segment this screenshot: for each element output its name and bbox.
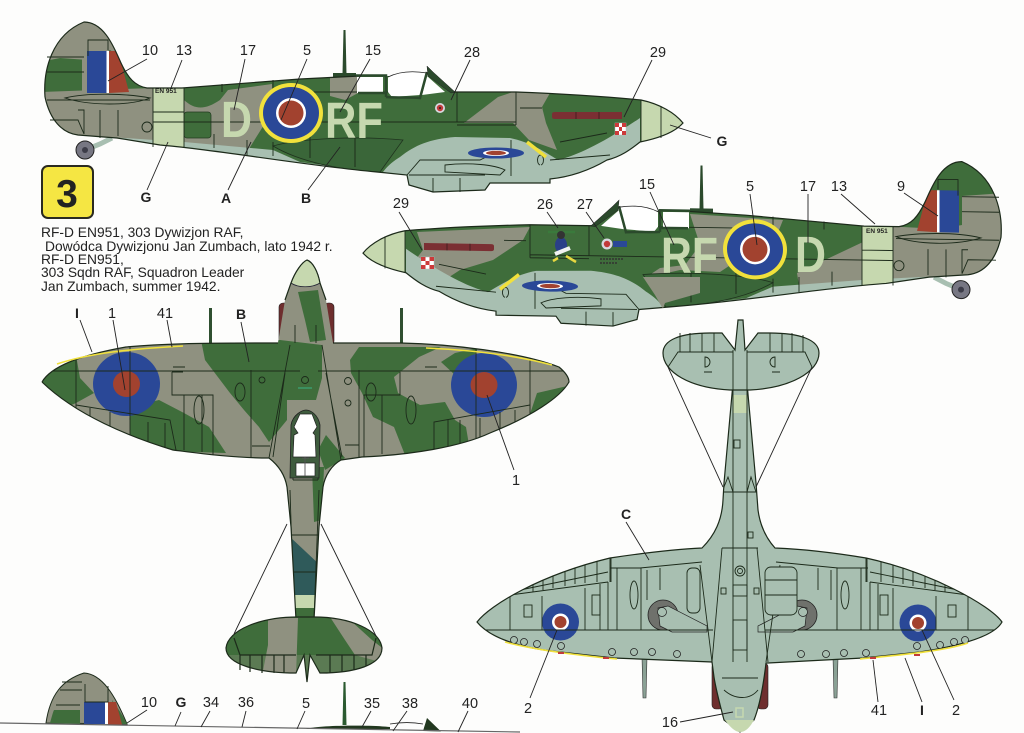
wheels bbox=[648, 600, 817, 632]
duck emblem bbox=[548, 231, 576, 262]
callouts: top side view bbox=[108, 43, 728, 206]
label 9 bbox=[897, 179, 938, 216]
label 2 right: 2 bbox=[952, 703, 960, 719]
label B: B bbox=[301, 190, 311, 206]
serial EN951: EN 951 bbox=[866, 228, 888, 235]
label 38: 38 bbox=[402, 696, 418, 712]
label B: B bbox=[236, 306, 246, 322]
label 13: 13 bbox=[176, 43, 192, 59]
label 15 bbox=[340, 43, 381, 112]
label G right bbox=[670, 125, 728, 149]
callouts: second side view bbox=[393, 177, 938, 250]
label 2 right bbox=[922, 630, 960, 719]
label 1: 1 bbox=[108, 306, 116, 322]
label 41 bbox=[157, 306, 173, 347]
label 29: 29 bbox=[650, 45, 666, 61]
label 36 bbox=[238, 695, 254, 727]
polish checker bbox=[615, 123, 626, 135]
squadron badge bbox=[435, 103, 445, 113]
label 36: 36 bbox=[238, 695, 254, 711]
label 5: 5 bbox=[302, 696, 310, 712]
label 16: 16 bbox=[662, 715, 678, 731]
label I: I bbox=[75, 305, 79, 321]
label B bbox=[301, 147, 340, 206]
label 1 right bbox=[487, 395, 520, 489]
page edge bbox=[0, 723, 520, 732]
label I bbox=[905, 658, 924, 718]
label A: A bbox=[221, 190, 231, 206]
caption: RF-D EN951, bbox=[41, 252, 124, 267]
label 15: 15 bbox=[365, 43, 381, 59]
callouts: top view bbox=[75, 305, 520, 489]
label 17: 17 bbox=[800, 179, 816, 195]
label 2 left: 2 bbox=[524, 701, 532, 717]
label 26: 26 bbox=[537, 197, 553, 213]
caption: Jan Zumbach, summer 1942. bbox=[41, 279, 220, 294]
serial EN951: EN 951 bbox=[155, 88, 177, 95]
caption: Dowódca Dywizjonu Jan Zumbach, lato 1942 r. bbox=[45, 239, 333, 254]
label 5 bbox=[281, 43, 311, 120]
bracing lines bbox=[234, 524, 376, 636]
label 40: 40 bbox=[462, 696, 478, 712]
label 5: 5 bbox=[303, 43, 311, 59]
badge number 3 bbox=[42, 166, 93, 218]
label G: G bbox=[176, 694, 187, 710]
label 35: 35 bbox=[364, 696, 380, 712]
label 10 bbox=[127, 695, 157, 723]
label 27: 27 bbox=[577, 197, 593, 213]
label G bbox=[175, 694, 187, 726]
label 17: 17 bbox=[240, 43, 256, 59]
callouts: underside view bbox=[524, 506, 960, 731]
label 29 bbox=[624, 45, 666, 117]
side view second bbox=[362, 161, 1002, 327]
label G left: G bbox=[141, 189, 152, 205]
squadron badge bbox=[600, 238, 627, 263]
label 10 bbox=[108, 43, 158, 81]
label 35 bbox=[362, 696, 380, 727]
underwing roundels bbox=[542, 604, 936, 642]
code letter D: D bbox=[795, 226, 826, 283]
label 13: 13 bbox=[831, 179, 847, 195]
label 34: 34 bbox=[203, 695, 219, 711]
label 5 bbox=[297, 696, 310, 729]
label 27 bbox=[577, 197, 604, 238]
canopy bbox=[290, 410, 320, 478]
label 17 bbox=[234, 43, 256, 110]
tailplane underside bbox=[663, 320, 819, 390]
label 41: 41 bbox=[157, 306, 173, 322]
label C bbox=[621, 506, 649, 560]
label 40 bbox=[458, 696, 478, 732]
wings and fuselage camouflage bbox=[42, 284, 568, 616]
underside view aircraft bbox=[477, 320, 1002, 732]
polish checker bbox=[421, 257, 434, 269]
label 29 bbox=[393, 196, 422, 250]
label 15 bbox=[639, 177, 674, 245]
label 34 bbox=[201, 695, 219, 727]
code letters RF: RF bbox=[325, 92, 383, 149]
label 17 bbox=[800, 179, 816, 243]
label A bbox=[221, 142, 251, 206]
top view aircraft bbox=[30, 255, 580, 685]
label I: I bbox=[920, 702, 924, 718]
label 1 right: 1 bbox=[512, 473, 520, 489]
label 15: 15 bbox=[639, 177, 655, 193]
tailplane bbox=[226, 618, 382, 676]
label I bbox=[75, 305, 92, 352]
label B bbox=[236, 306, 249, 362]
caption: 303 Sqdn RAF, Squadron Leader bbox=[41, 265, 245, 280]
label 41 bbox=[871, 660, 887, 719]
bracing lines bbox=[668, 367, 812, 487]
side view bottom partial bbox=[46, 673, 441, 732]
label 2 left bbox=[524, 630, 557, 717]
wing and fuselage bbox=[477, 383, 1002, 732]
label 13 bbox=[831, 179, 875, 224]
caption: RF-D EN951, 303 Dywizjon RAF, bbox=[41, 225, 243, 240]
label 13 bbox=[171, 43, 192, 88]
label 1 bbox=[108, 306, 125, 390]
label 28 bbox=[451, 45, 480, 100]
label 9: 9 bbox=[897, 179, 905, 195]
callouts: bottom partial view bbox=[127, 694, 478, 732]
side view top bbox=[44, 21, 684, 193]
code letter D: D bbox=[221, 91, 252, 148]
label 5 bbox=[746, 179, 757, 245]
label 26 bbox=[537, 197, 558, 228]
label 38 bbox=[393, 696, 418, 731]
label 10: 10 bbox=[142, 43, 158, 59]
label 16 bbox=[662, 712, 733, 731]
label G left bbox=[141, 142, 168, 205]
badge number 3: 3 bbox=[56, 173, 78, 216]
label G right: G bbox=[717, 133, 728, 149]
label 29: 29 bbox=[393, 196, 409, 212]
label 5: 5 bbox=[746, 179, 754, 195]
label 10: 10 bbox=[141, 695, 157, 711]
label C: C bbox=[621, 506, 631, 522]
code letters RF: RF bbox=[661, 227, 718, 284]
label 28: 28 bbox=[464, 45, 480, 61]
label 41: 41 bbox=[871, 703, 887, 719]
